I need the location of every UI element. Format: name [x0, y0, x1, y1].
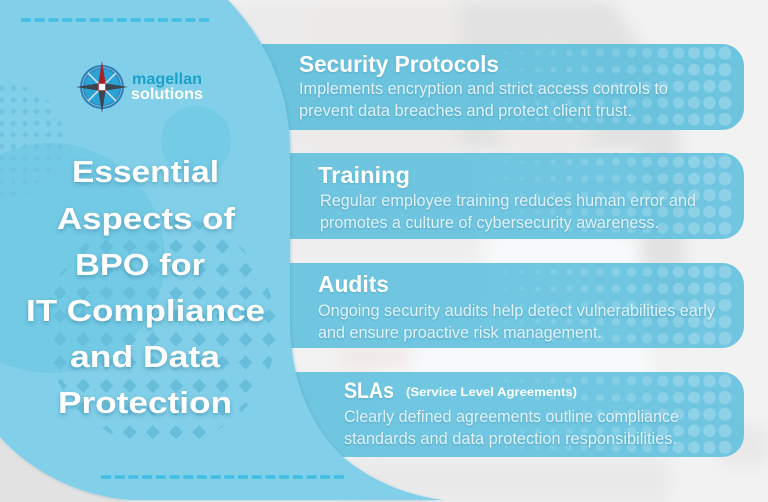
text: security protocols: Implements encryption and strict access controls to — [299, 80, 668, 98]
logo wordmark — [131, 71, 203, 103]
title: Essential — [72, 155, 219, 189]
text: SLAs: Clearly defined agreements outline compliance — [344, 408, 679, 426]
title: and Data — [70, 340, 221, 374]
text: security protocols: prevent data breaches and protect client trust. — [299, 102, 632, 120]
band: SLAs — [200, 372, 744, 458]
logo wordmark: magellan — [132, 71, 202, 88]
left panel — [0, 0, 443, 500]
band: security protocols — [200, 44, 744, 130]
text: audits — [318, 271, 716, 342]
panel decoration: diamond dot patterns — [0, 80, 280, 448]
logo wordmark: solutions — [131, 86, 203, 103]
title: IT Compliance — [26, 294, 265, 328]
text: SLAs: (Service Level Agreements) — [406, 387, 577, 399]
text: training: promotes a culture of cybersecurity awareness. — [320, 214, 659, 232]
dashed line bottom — [101, 475, 344, 479]
text: audits: and ensure proactive risk management. — [318, 324, 602, 342]
title: Protection — [58, 386, 232, 420]
logo: magellan solutions — [76, 61, 203, 113]
dashed line top — [21, 18, 212, 22]
text: audits: Ongoing security audits help detect vulnerabilities early — [318, 302, 716, 320]
text: SLAs — [344, 378, 679, 448]
band: audits — [200, 263, 744, 349]
text: SLAs: standards and data protection responsibilities. — [344, 430, 677, 448]
text: security protocols: Security Protocols — [299, 51, 499, 77]
title: Aspects of — [57, 202, 236, 236]
text: training — [318, 162, 696, 232]
text: SLAs: SLAs — [344, 378, 394, 403]
panel decoration: background circles — [0, 106, 231, 373]
text: audits: Audits — [318, 271, 389, 297]
title — [26, 155, 265, 420]
text: training: Training — [318, 162, 410, 188]
icon: compass — [76, 61, 128, 113]
text: security protocols — [299, 51, 668, 120]
text: training: Regular employee training reduces human error and — [320, 192, 696, 210]
band: training — [200, 153, 744, 239]
title: BPO for — [75, 248, 205, 282]
